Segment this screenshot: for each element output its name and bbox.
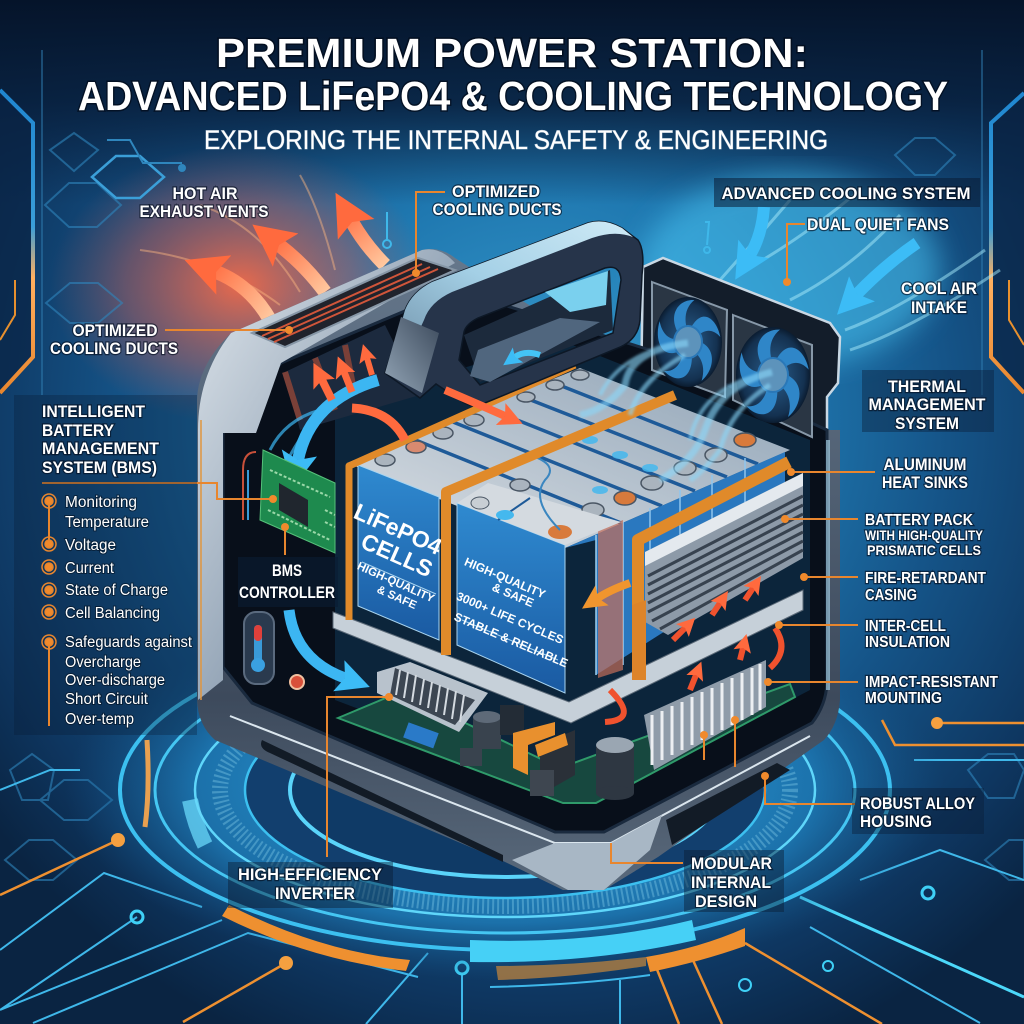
label: robust alloy housing: HOUSING bbox=[860, 812, 932, 831]
label: optimized cooling ducts top bbox=[432, 182, 562, 219]
label: battery pack: PRISMATIC CELLS bbox=[867, 542, 981, 558]
label: modular internal design: INTERNAL bbox=[691, 873, 771, 892]
title bbox=[78, 30, 948, 155]
label: thermal management system: THERMAL bbox=[888, 377, 966, 396]
label: battery pack: BATTERY PACK bbox=[865, 512, 973, 529]
handle bbox=[385, 221, 643, 406]
BMS heading: MANAGEMENT bbox=[42, 439, 160, 458]
inner cavity bbox=[223, 290, 827, 832]
cool air intake arrows bbox=[720, 190, 1000, 350]
label: inter-cell insulation: INSULATION bbox=[865, 634, 950, 651]
label: hot air exhaust vents bbox=[140, 184, 268, 221]
label: robust alloy housing: ROBUST ALLOY bbox=[860, 794, 976, 813]
battery cell tops bbox=[347, 368, 790, 678]
label: cool air intake bbox=[901, 279, 977, 317]
cell: LiFePO4: CELLS bbox=[357, 528, 437, 582]
cell: LiFePO4: LiFePO4 bbox=[350, 498, 446, 560]
BMS list: Voltage bbox=[65, 537, 116, 554]
label: thermal management system: SYSTEM bbox=[895, 414, 959, 433]
base lip bbox=[261, 740, 503, 862]
label: dual quiet fans: DUAL QUIET FANS bbox=[807, 215, 949, 234]
BMS list bbox=[65, 494, 193, 728]
fan airflow wisps bbox=[580, 343, 772, 480]
housing shell bbox=[197, 249, 840, 890]
cell: specifications: & SAFE bbox=[490, 580, 536, 610]
label: optimized cooling ducts left: OPTIMIZED bbox=[72, 321, 158, 340]
label: high-efficiency inverter: HIGH-EFFICIENCY bbox=[238, 865, 383, 884]
fan 2 bbox=[732, 315, 812, 437]
label: thermal management system: MANAGEMENT bbox=[868, 395, 986, 414]
label: aluminum heat sinks: HEAT SINKS bbox=[882, 473, 968, 492]
BMS list: Safeguards against bbox=[65, 634, 193, 651]
label: battery pack bbox=[865, 512, 984, 558]
battery terminals bbox=[375, 370, 756, 517]
inverter heat sink bbox=[377, 662, 488, 732]
label: BMS controller: CONTROLLER bbox=[239, 583, 335, 602]
label: thermal management system bbox=[862, 370, 994, 433]
electronics board bbox=[338, 660, 795, 803]
BMS list: Temperature bbox=[65, 514, 149, 531]
label: hot air exhaust vents: EXHAUST VENTS bbox=[140, 202, 268, 221]
label: impact-resistant mounting: IMPACT-RESISTANT bbox=[865, 674, 998, 691]
BMS heading: SYSTEM (BMS) bbox=[42, 458, 157, 477]
BMS list: Short Circuit bbox=[65, 691, 149, 708]
fans bbox=[651, 282, 812, 437]
BMS list: Current bbox=[65, 560, 115, 577]
BMS board bbox=[243, 450, 335, 553]
label: optimized cooling ducts left bbox=[50, 321, 178, 358]
thermometer circuit icons bbox=[383, 212, 710, 253]
label: optimized cooling ducts top: COOLING DUCTS bbox=[432, 200, 562, 219]
label: inter-cell insulation: INTER-CELL bbox=[865, 618, 946, 635]
leader lines bbox=[42, 192, 875, 863]
capacitors bbox=[473, 705, 634, 800]
concentric rings bbox=[65, 600, 945, 980]
silver corner bbox=[198, 249, 455, 700]
label: robust alloy housing bbox=[852, 788, 984, 834]
label: cool air intake: INTAKE bbox=[911, 298, 967, 317]
label: fire-retardant casing: CASING bbox=[865, 587, 917, 604]
BMS list: Monitoring bbox=[65, 494, 137, 511]
title: ADVANCED LiFePO4 & COOLING TECHNOLOGY bbox=[78, 73, 948, 119]
panel: intelligent BMS bbox=[14, 395, 197, 735]
label: impact-resistant mounting: MOUNTING bbox=[865, 690, 942, 707]
label: fire-retardant casing: FIRE-RETARDANT bbox=[865, 570, 986, 587]
right heat sink bbox=[644, 660, 766, 770]
BMS list: Over-temp bbox=[65, 711, 134, 728]
label: optimized cooling ducts top: OPTIMIZED bbox=[452, 182, 540, 201]
cell: specifications: HIGH-QUALITY bbox=[462, 555, 548, 601]
fire-retardant strap bbox=[632, 600, 646, 680]
label: optimized cooling ducts left: COOLING DUCTS bbox=[50, 339, 178, 358]
label: advanced cooling system: ADVANCED COOLING SYSTEM bbox=[722, 184, 970, 203]
label: hot air exhaust vents: HOT AIR bbox=[172, 184, 238, 203]
bottom orange arcs bbox=[0, 717, 1024, 1024]
label: impact-resistant mounting bbox=[865, 674, 998, 707]
label: inter-cell insulation bbox=[865, 618, 950, 651]
label: high-efficiency inverter bbox=[228, 862, 393, 908]
BMS list: State of Charge bbox=[65, 582, 168, 599]
label: battery pack: WITH HIGH-QUALITY bbox=[865, 527, 984, 543]
internal airflow arrows bbox=[270, 353, 630, 678]
power station device bbox=[197, 249, 840, 890]
title: PREMIUM POWER STATION: bbox=[216, 30, 808, 76]
label: modular internal design: MODULAR bbox=[691, 854, 772, 873]
BMS heading bbox=[42, 402, 160, 477]
cell: specifications bbox=[452, 455, 621, 693]
BMS bullets bbox=[42, 494, 56, 726]
heat sink bbox=[645, 473, 803, 635]
cell: specifications: 3000+ LIFE CYCLES bbox=[454, 589, 566, 647]
top vent bbox=[252, 258, 455, 347]
label: high-efficiency inverter: INVERTER bbox=[275, 884, 355, 903]
label: fire-retardant casing bbox=[865, 570, 986, 604]
label: aluminum heat sinks: ALUMINUM bbox=[884, 455, 966, 474]
BMS list: Overcharge bbox=[65, 654, 141, 671]
label: modular internal design bbox=[684, 850, 784, 912]
thermometer and button bbox=[244, 612, 304, 689]
BMS heading: BATTERY bbox=[42, 421, 115, 440]
cell: LiFePO4 bbox=[350, 465, 446, 640]
label: advanced cooling system bbox=[714, 178, 980, 207]
fan 1 bbox=[651, 282, 727, 397]
title: EXPLORING THE INTERNAL SAFETY & ENGINEERING bbox=[204, 125, 828, 155]
red airflow under the tray bbox=[605, 588, 781, 722]
BMS list: Over-discharge bbox=[65, 672, 165, 689]
label: aluminum heat sinks bbox=[882, 455, 968, 492]
cell: LiFePO4: & SAFE bbox=[375, 584, 419, 612]
label: cool air intake: COOL AIR bbox=[901, 279, 977, 298]
rear frame bbox=[640, 258, 840, 450]
orange straps bbox=[349, 365, 789, 680]
cell: LiFePO4: HIGH-QUALITY bbox=[355, 561, 436, 605]
duct interior bbox=[285, 325, 420, 430]
battery tray bbox=[333, 590, 803, 723]
BMS list: Cell Balancing bbox=[65, 605, 160, 622]
label: modular internal design: DESIGN bbox=[695, 892, 757, 911]
BMS heading: INTELLIGENT bbox=[42, 402, 146, 421]
hot air exhaust arrows bbox=[140, 175, 385, 320]
label: BMS controller bbox=[238, 557, 338, 607]
cell: specifications: STABLE & RELIABLE bbox=[452, 610, 570, 670]
label: BMS controller: BMS bbox=[272, 561, 302, 580]
